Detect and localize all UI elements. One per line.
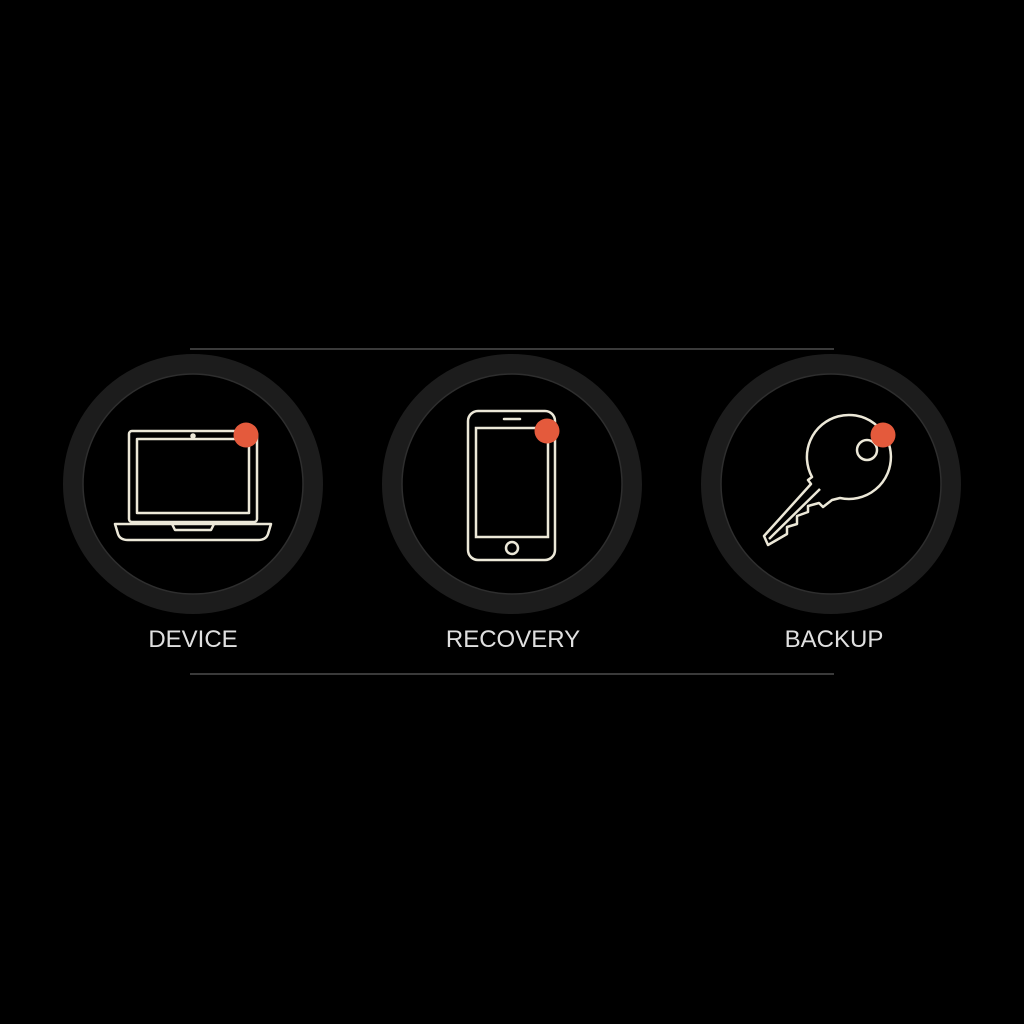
panel: recovery	[392, 364, 632, 653]
icon: key	[764, 415, 891, 545]
icon: phone	[468, 411, 555, 560]
panel: device	[73, 364, 313, 653]
icon: laptop	[115, 431, 271, 540]
label: backup: BACKUP	[785, 626, 883, 653]
label: recovery: RECOVERY	[446, 626, 580, 653]
label: device: DEVICE	[148, 626, 238, 653]
panel: backup	[711, 364, 951, 653]
